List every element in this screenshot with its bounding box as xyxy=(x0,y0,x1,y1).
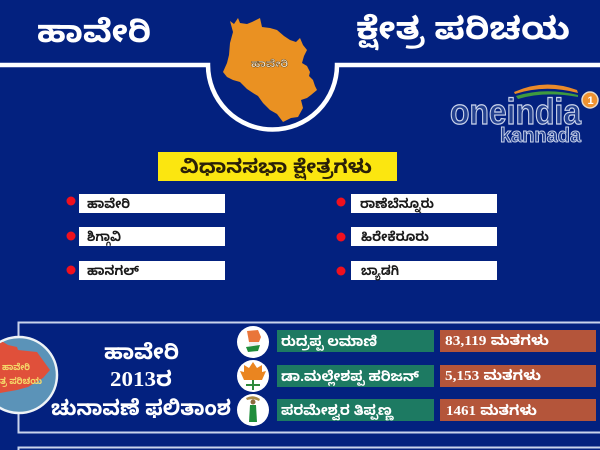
map: Haveri district: ಹಾವೇರಿ xyxy=(251,58,288,70)
badge: constituency map: ತ್ರ ಪರಿಚಯ xyxy=(0,376,43,387)
logo: oneindia kannada: oneindia xyxy=(450,91,582,132)
row: BJP candidate: 5,153 ಮತಗಳು xyxy=(445,367,541,384)
row: BJP candidate xyxy=(277,365,596,387)
row: Congress candidate xyxy=(277,330,596,352)
list: right constituencies xyxy=(336,194,497,281)
row: KJP candidate: 1461 ಮತಗಳು xyxy=(446,402,537,419)
logo: oneindia kannada xyxy=(450,84,598,147)
heading: election results: ಹಾವೇರಿ xyxy=(104,341,179,364)
icon: Congress hand xyxy=(237,326,269,358)
icon: farmer with plough xyxy=(237,394,269,426)
heading: assembly constituencies xyxy=(158,152,397,181)
panel: 2013 election results xyxy=(0,322,600,432)
logo: oneindia kannada: 1 xyxy=(588,95,594,107)
badge: constituency map xyxy=(0,337,57,413)
list: left constituencies: ಶಿಗ್ಗಾವಿ xyxy=(87,229,121,246)
row: BJP candidate: ಡಾ.ಮಲ್ಲೇಶಪ್ಪ ಹರಿಜನ್ xyxy=(281,368,420,387)
row: KJP candidate xyxy=(277,399,596,421)
list: right constituencies: ಬ್ಯಾಡಗಿ xyxy=(361,263,399,281)
map: Haveri district xyxy=(223,18,317,122)
title: Haveri: ಹಾವೇರಿ xyxy=(37,14,151,49)
logo: oneindia kannada: kannada xyxy=(500,125,582,147)
list: right constituencies: ಹಿರೇಕೆರೂರು xyxy=(361,229,429,244)
list: left constituencies: ಹಾನಗಲ್ xyxy=(87,263,139,278)
row: KJP candidate: ಪರಮೇಶ್ವರ ತಿಪ್ಪಣ್ಣ xyxy=(281,402,394,421)
list: right constituencies: ರಾಣೆಬೆನ್ನೂರು xyxy=(360,196,434,213)
title: constituency introduction: ಕ್ಷೇತ್ರ ಪರಿಚಯ xyxy=(356,11,570,51)
heading: assembly constituencies: ವಿಧಾನಸಭಾ ಕ್ಷೇತ್ರಗಳು xyxy=(180,157,372,180)
icon: BJP lotus xyxy=(237,360,269,392)
row: Congress candidate: ರುದ್ರಪ್ಪ ಲಮಾಣಿ xyxy=(281,333,377,351)
heading: election results: ಚುನಾವಣೆ ಫಲಿತಾಂಶ xyxy=(51,397,231,420)
list: left constituencies: ಹಾವೇರಿ xyxy=(87,196,130,211)
list: left constituencies xyxy=(66,194,225,280)
badge: constituency map: ಹಾವೇರಿ xyxy=(2,362,30,372)
heading: election results xyxy=(51,341,231,420)
row: Congress candidate: 83,119 ಮತಗಳು xyxy=(445,332,549,349)
panel: next section top edge xyxy=(18,448,600,450)
heading: election results: 2013ರ xyxy=(110,367,172,391)
